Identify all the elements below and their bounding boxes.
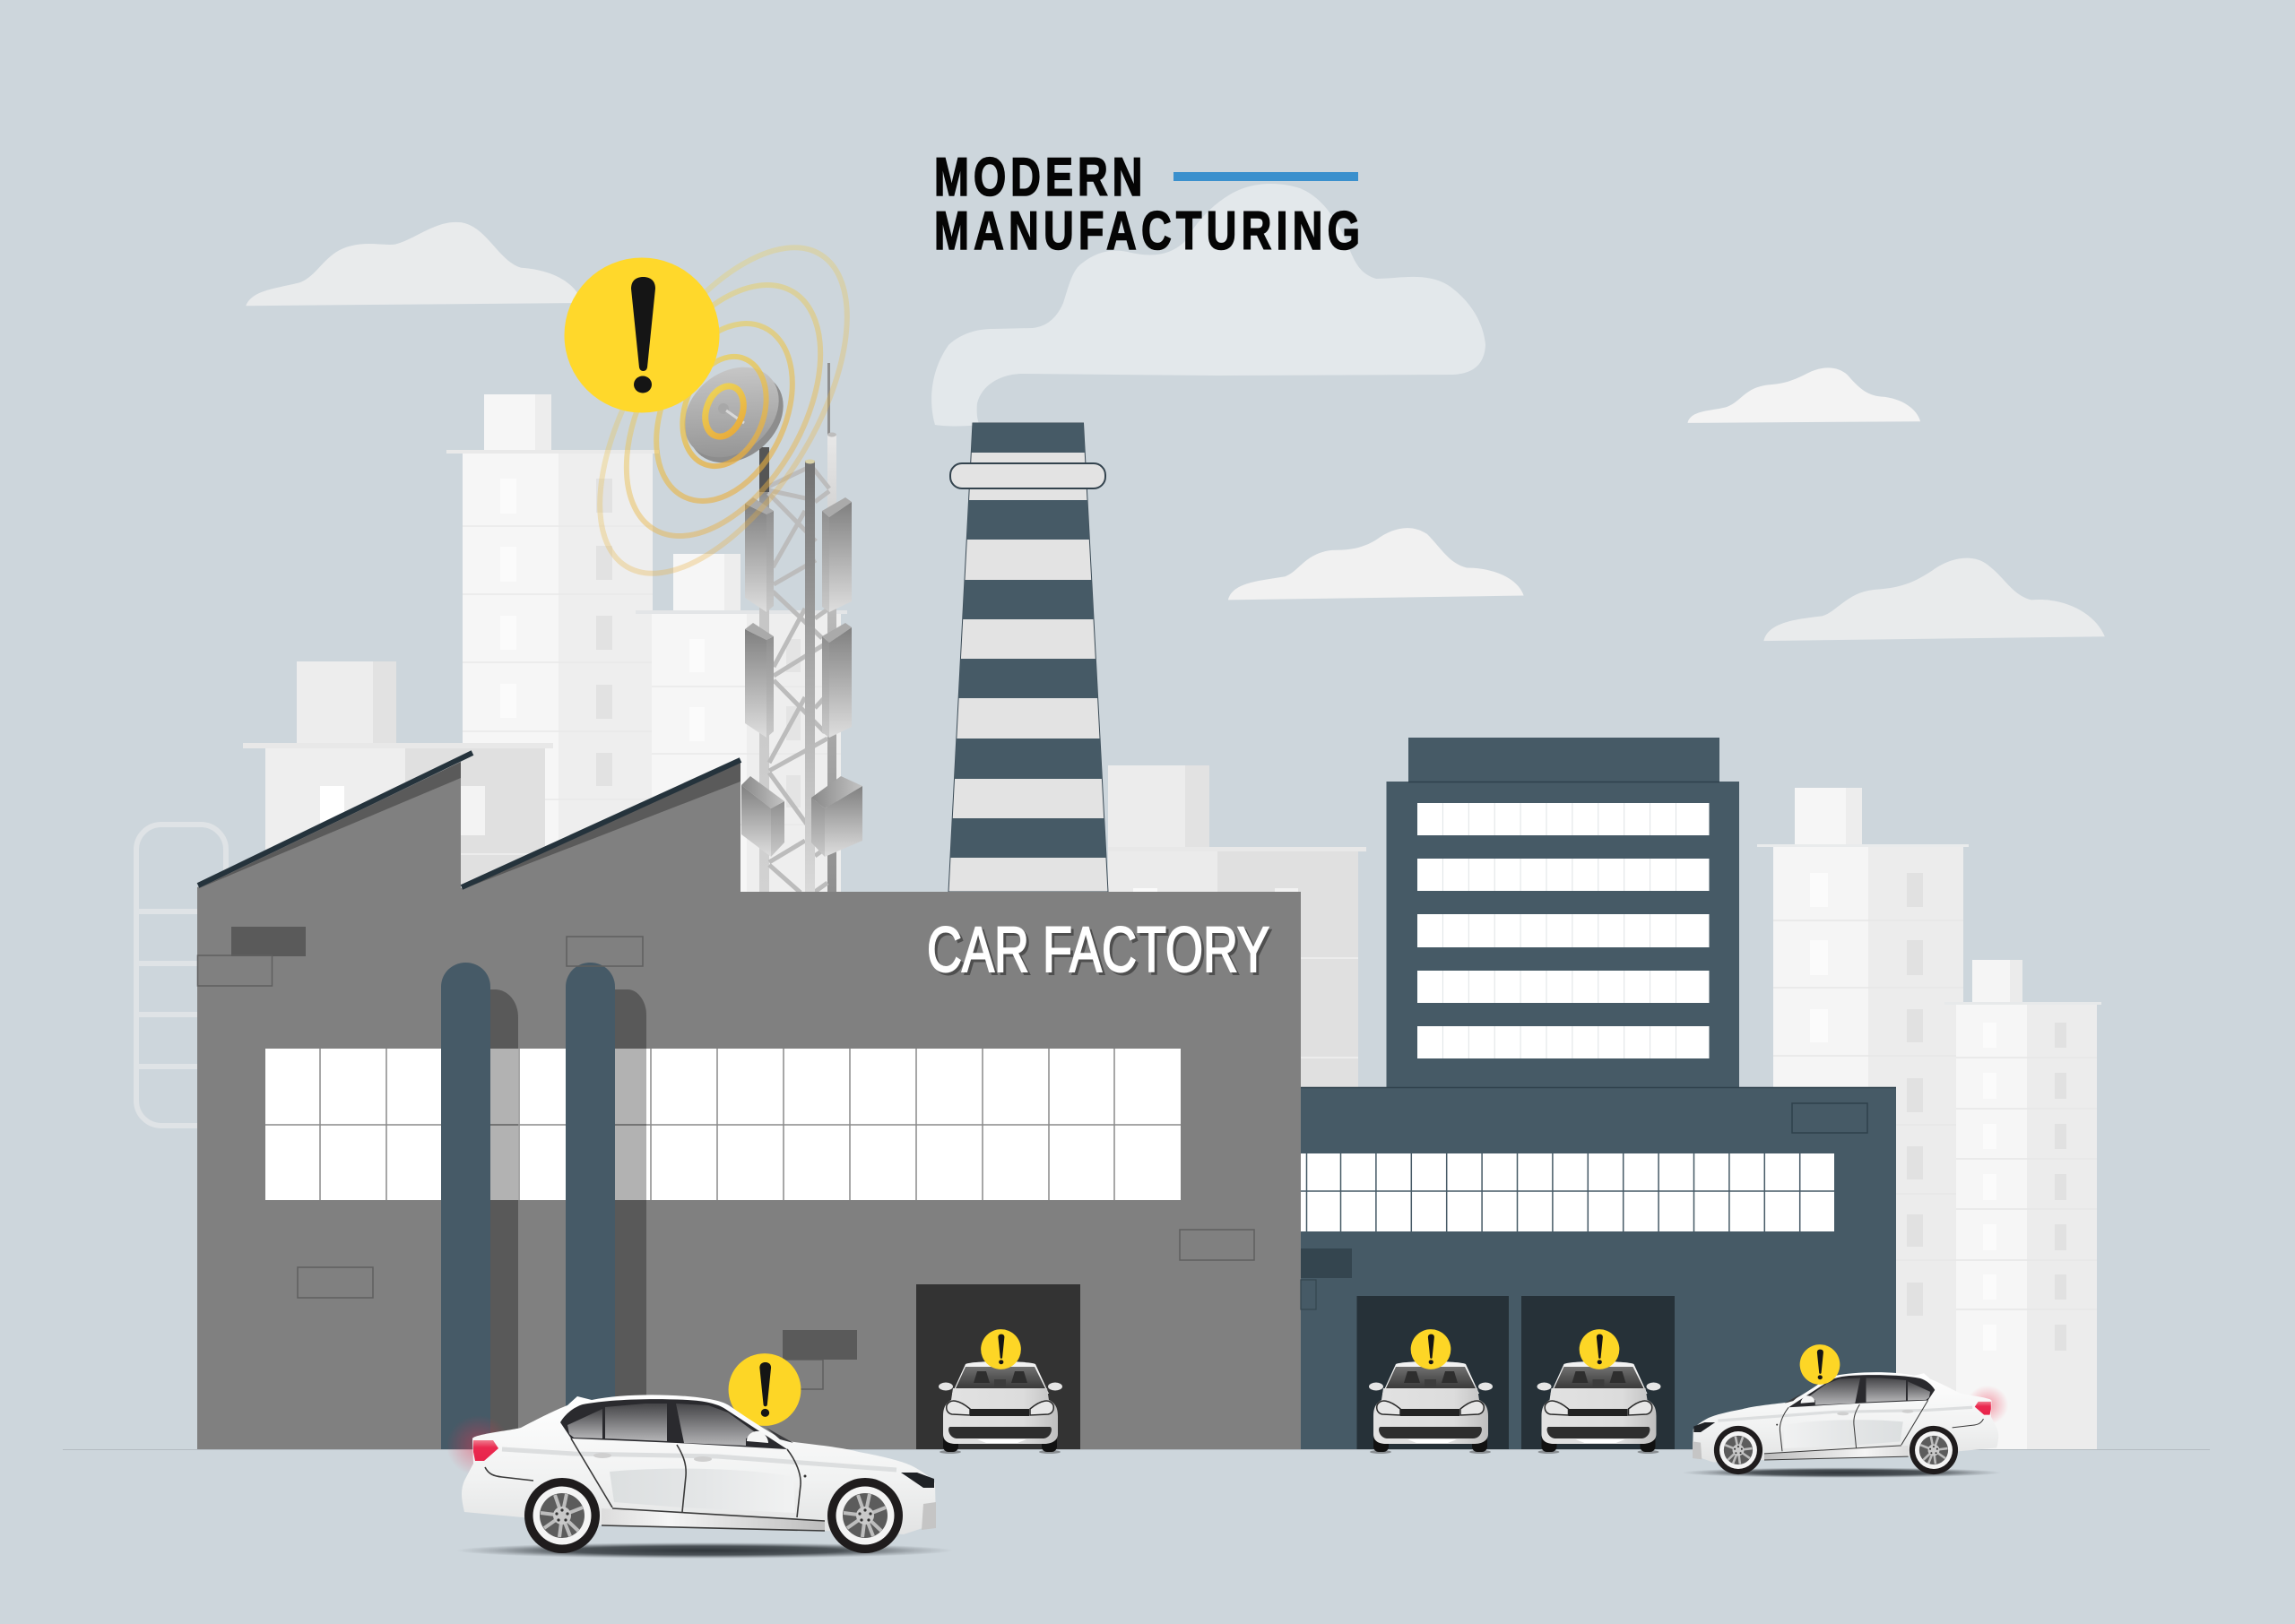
office window rows xyxy=(1417,803,1709,1058)
annex window band xyxy=(1301,1153,1834,1231)
cloud: right xyxy=(1763,558,2105,641)
background building: right tower xyxy=(1757,788,1969,1449)
chimney smoke xyxy=(931,184,1485,427)
communications tower xyxy=(666,349,862,896)
alert icon: small sedan xyxy=(1800,1344,1840,1385)
annex doors xyxy=(1357,1296,1675,1449)
annex vents xyxy=(1301,1103,1867,1309)
office tower xyxy=(1386,738,1739,1088)
background building: far left low block xyxy=(243,661,553,981)
car: large sedan foreground xyxy=(446,1395,953,1559)
background building: tall left tower xyxy=(446,394,659,902)
alert icon: antenna xyxy=(565,258,719,412)
factory sign: CAR FACTORY xyxy=(930,918,1272,989)
wall vents xyxy=(197,927,1254,1389)
factory main building xyxy=(197,753,1301,1449)
antenna panels xyxy=(741,497,862,857)
alert icon: large sedan xyxy=(729,1353,801,1426)
roof underside shading xyxy=(197,761,740,890)
alert icon: annex door one car xyxy=(1411,1329,1451,1369)
factory window band xyxy=(265,1049,1181,1200)
car: front view in annex door two xyxy=(1537,1361,1660,1454)
pipe shadows xyxy=(490,989,646,1449)
title: MODERN xyxy=(934,147,1142,207)
cloud: upper left xyxy=(246,222,583,306)
alert icon: annex door two car xyxy=(1580,1329,1619,1369)
title: MANUFACTURING xyxy=(934,201,1360,261)
dark annex building xyxy=(1301,1087,1896,1449)
car: front view in annex door one xyxy=(1369,1361,1493,1454)
background ladder tank xyxy=(136,825,226,1126)
car: front view in factory door xyxy=(939,1361,1062,1454)
factory door xyxy=(916,1284,1080,1449)
factory chimney xyxy=(948,423,1108,892)
alert icon: factory door car xyxy=(981,1329,1021,1369)
background building: far right block xyxy=(1944,960,2101,1449)
background building: tower behind antenna xyxy=(636,554,847,901)
cloud: upper right xyxy=(1688,367,1920,423)
car: small sedan right xyxy=(1682,1372,2008,1478)
cloud: centre xyxy=(1228,528,1524,600)
factory sign: CAR FACTORY xyxy=(927,915,1269,986)
satellite dish xyxy=(666,349,801,492)
background building: centre behind factory xyxy=(1108,765,1366,1093)
title accent bar xyxy=(1173,172,1358,181)
ground line xyxy=(63,1448,2210,1450)
roof edges xyxy=(198,753,740,887)
pipes xyxy=(441,963,615,1449)
title xyxy=(934,147,1360,261)
signal rings xyxy=(550,207,896,614)
